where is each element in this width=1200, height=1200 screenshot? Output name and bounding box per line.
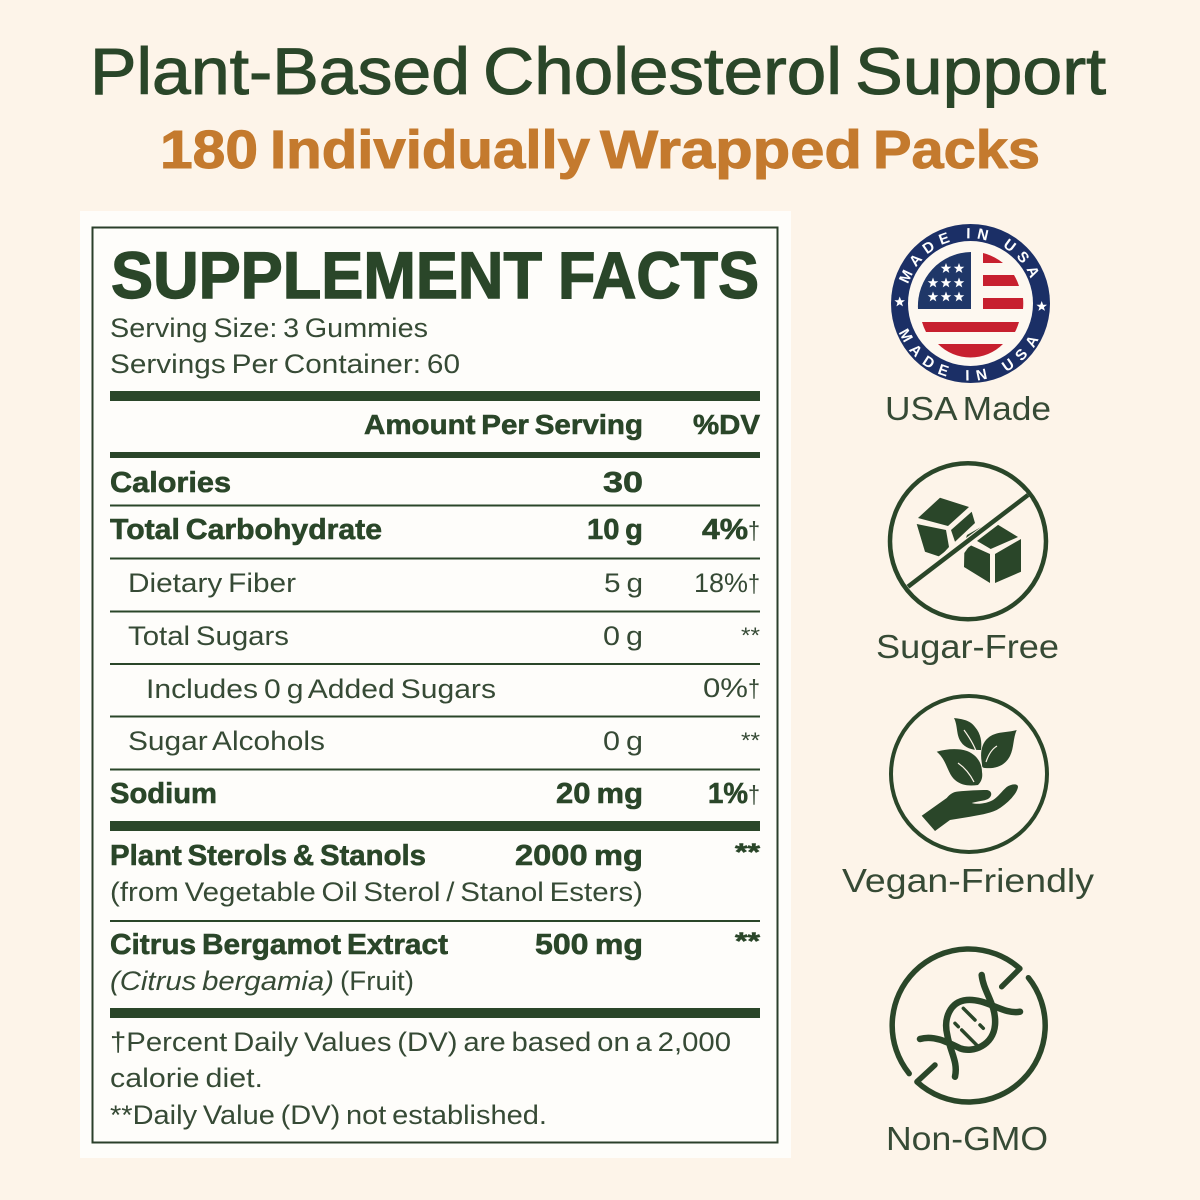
row: calories: Calories <box>110 467 231 499</box>
row: plant sterols and stanols: Plant Sterols & Stanols <box>110 840 426 872</box>
row: plant sterols and stanols: ** <box>735 839 761 866</box>
row: total sugars: Total Sugars <box>128 621 289 651</box>
row: plant sterols and stanols: (from Vegetable Oil Sterol / Stanol Esters) <box>110 877 643 907</box>
row: sugar alcohols: Sugar Alcohols <box>128 726 325 756</box>
subtitle: Individually <box>270 120 590 180</box>
column headers: Amount Per Serving <box>364 409 643 440</box>
icon: made in USA badge: MADE IN USA <box>898 328 1039 380</box>
icon: made in USA badge <box>891 224 1050 383</box>
row: total carbohydrate <box>110 514 760 546</box>
row: dietary fiber: † <box>748 570 760 598</box>
row: dietary fiber: 18% <box>694 568 748 598</box>
subtitle: Wrapped <box>600 120 862 180</box>
subtitle: 180 <box>160 120 258 180</box>
row: sodium: 20 mg <box>556 778 643 810</box>
row: dietary fiber: 5 g <box>604 568 643 598</box>
row: dietary fiber <box>128 568 760 598</box>
row: added sugars <box>146 673 760 704</box>
row: added sugars: Includes 0 g Added Sugars <box>146 674 496 704</box>
row: total carbohydrate: Total Carbohydrate <box>110 514 382 546</box>
title: Support <box>855 34 1106 108</box>
row: total sugars: 0 g <box>603 621 643 651</box>
panel: supplement facts <box>80 211 791 1158</box>
icon: made in USA badge: MADE IN USA <box>898 228 1038 284</box>
row: calories <box>110 467 643 499</box>
heading: supplement facts: SUPPLEMENT <box>111 238 542 312</box>
row: citrus bergamot extract: ** <box>735 928 761 955</box>
label: Non-GMO: Non-GMO <box>886 1120 1048 1157</box>
row: sodium <box>110 778 760 810</box>
footnotes: **Daily Value (DV) not established. <box>110 1100 547 1130</box>
row: added sugars: 0% <box>703 673 748 703</box>
row: citrus bergamot extract: 500 mg <box>535 929 643 961</box>
row: sodium: Sodium <box>110 778 217 810</box>
row: total carbohydrate: † <box>748 517 760 545</box>
row: plant sterols and stanols: 2000 mg <box>515 840 643 872</box>
subtitle: Packs <box>873 120 1040 180</box>
row: citrus bergamot extract: (Fruit) <box>340 966 414 996</box>
column headers: %DV <box>693 409 760 440</box>
row: calories: 30 <box>603 467 643 499</box>
row: plant sterols and stanols <box>110 839 761 907</box>
column headers <box>364 409 760 440</box>
icon: sugar-free <box>890 463 1046 619</box>
row: dietary fiber: Dietary Fiber <box>128 568 296 598</box>
heading: supplement facts <box>111 238 759 312</box>
label: Vegan-Friendly: Vegan-Friendly <box>842 862 1095 899</box>
row: citrus bergamot extract <box>110 928 761 996</box>
row: added sugars: † <box>748 675 760 703</box>
title: Cholesterol <box>483 34 842 108</box>
heading: supplement facts: FACTS <box>558 238 759 312</box>
row: citrus bergamot extract: Citrus Bergamot Extract <box>110 929 448 961</box>
row: total carbohydrate: 4% <box>702 514 748 546</box>
footnotes: †Percent Daily Values (DV) are based on a 2,000 <box>110 1027 731 1057</box>
row: sodium: † <box>748 781 760 809</box>
row: sodium: 1% <box>708 778 748 810</box>
icon: non-GMO <box>892 949 1045 1102</box>
row: sugar alcohols: 0 g <box>603 726 643 756</box>
footnotes <box>110 1027 731 1130</box>
row: total sugars: ** <box>741 623 760 648</box>
table rules <box>110 391 760 1018</box>
row: sugar alcohols: ** <box>741 728 760 753</box>
label: Sugar-Free: Sugar-Free <box>876 628 1059 665</box>
serving info: Serving Size: 3 Gummies <box>110 313 428 343</box>
row: total carbohydrate: 10 g <box>587 514 643 546</box>
title: Plant-Based <box>90 34 470 108</box>
title <box>90 34 1106 108</box>
footnotes: calorie diet. <box>110 1063 263 1093</box>
label: USA Made: USA Made <box>885 390 1051 427</box>
serving info <box>110 313 460 379</box>
row: sugar alcohols <box>128 726 760 756</box>
subtitle <box>160 120 1040 180</box>
row: total sugars <box>128 621 760 651</box>
serving info: Servings Per Container: 60 <box>110 349 460 379</box>
row: citrus bergamot extract: (Citrus bergamia) <box>110 966 334 996</box>
icon: vegan-friendly <box>891 696 1047 852</box>
